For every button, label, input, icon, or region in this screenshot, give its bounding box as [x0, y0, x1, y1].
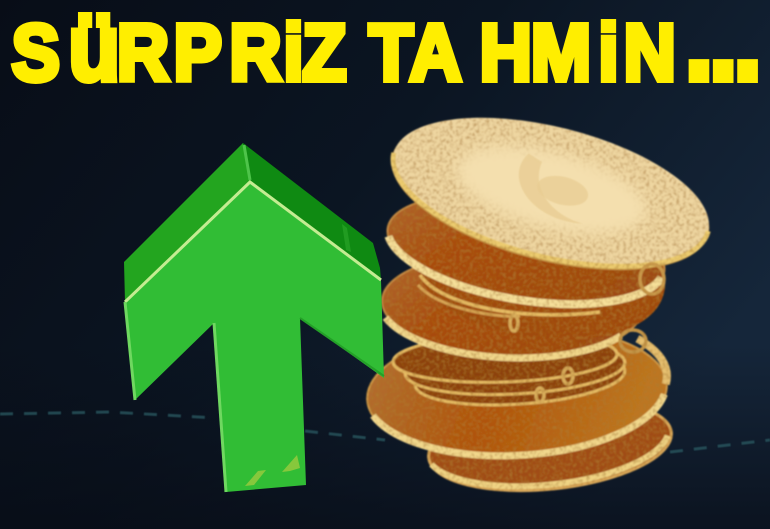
coin: bottom [424, 388, 676, 502]
title: M [531, 9, 591, 98]
title: i [599, 9, 619, 98]
rings [510, 264, 664, 402]
arrow: top-right bevel [243, 143, 381, 280]
title: i [284, 9, 304, 98]
title: A [410, 9, 461, 98]
dashed chart line [0, 412, 770, 452]
coin: third [380, 248, 644, 362]
arrow: top-left bevel [124, 143, 250, 302]
coin: mid orange body [418, 270, 665, 339]
icon: green up arrow [124, 143, 384, 492]
title: N [624, 9, 676, 98]
coin face: smooth centre and emblem [447, 129, 656, 251]
title [12, 0, 763, 106]
title: R [230, 9, 281, 98]
title: T [369, 9, 413, 98]
title: S [12, 9, 60, 98]
arrow: front face [125, 182, 384, 492]
coin: small under second [420, 275, 600, 315]
coin: top with crescent and star [376, 89, 725, 298]
title: H [480, 9, 532, 98]
title: Z [302, 9, 346, 98]
coin: large lower [364, 319, 671, 465]
coin: second [380, 177, 672, 323]
coins: inner small stack [392, 330, 627, 411]
title: R [117, 9, 169, 98]
title: P [174, 9, 222, 98]
arrow: highlights [125, 145, 384, 492]
coin stack [364, 89, 725, 502]
